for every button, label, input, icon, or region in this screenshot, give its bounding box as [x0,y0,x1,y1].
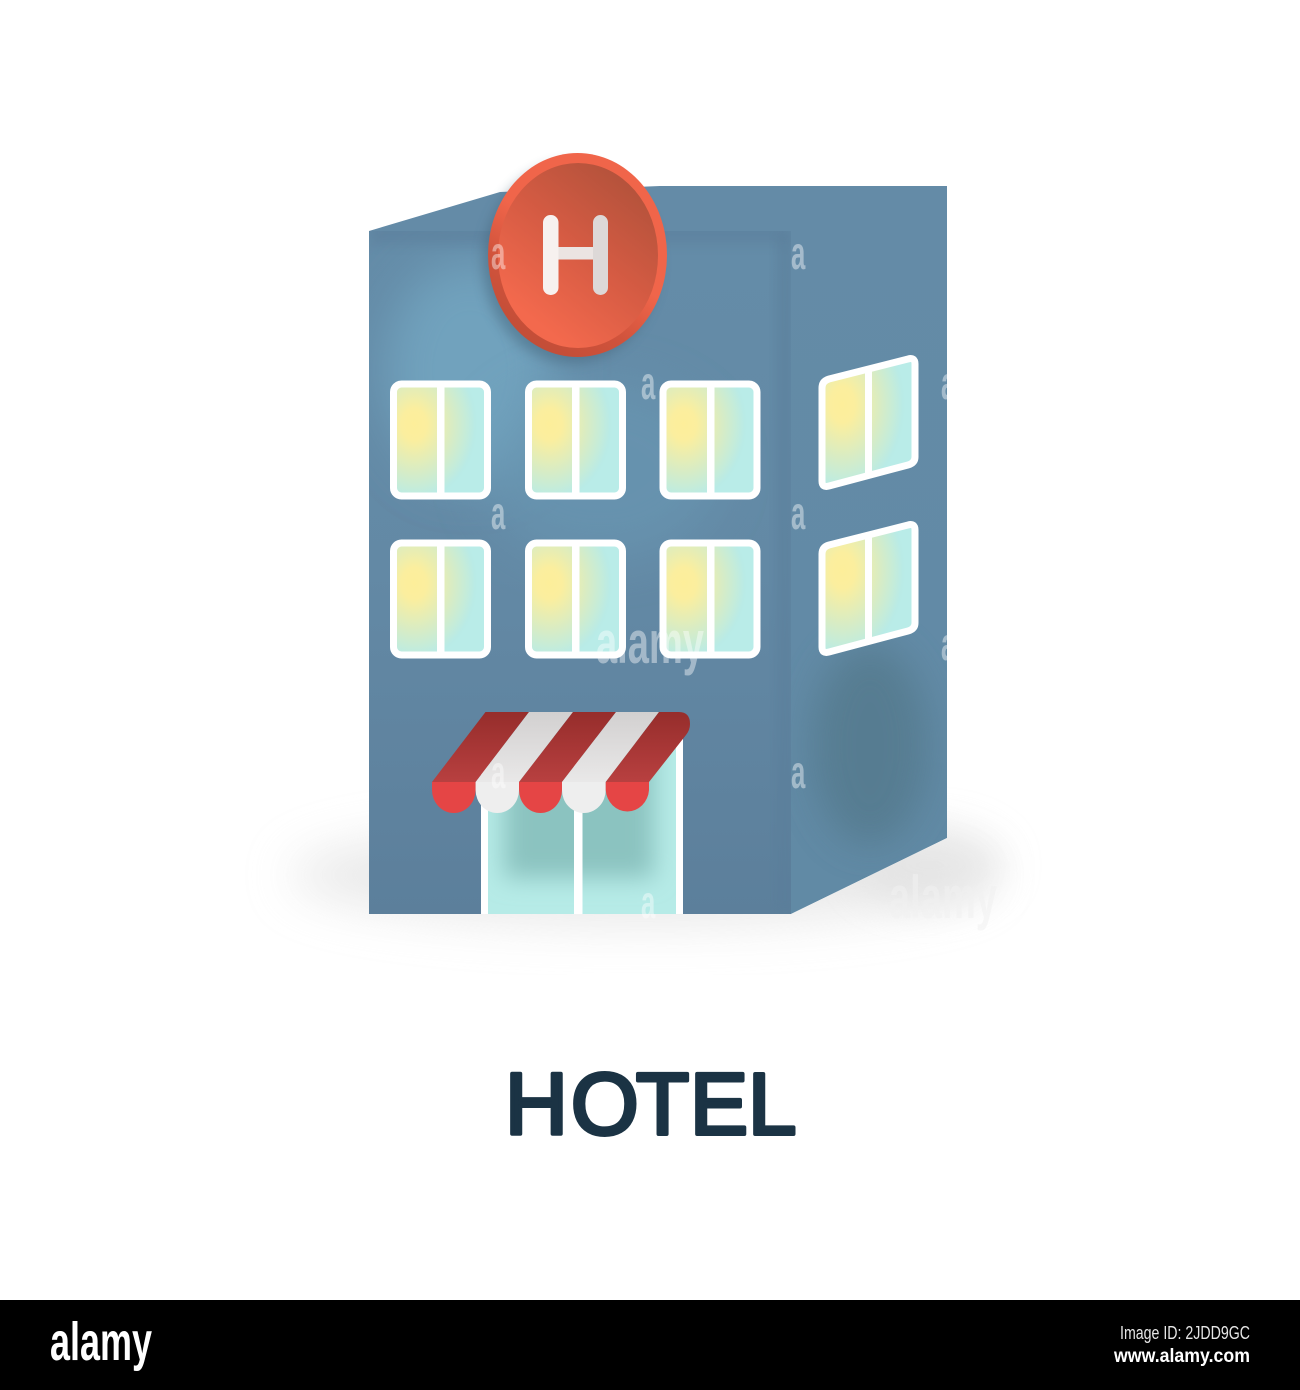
watermarks: alamy [889,864,997,931]
image id: Image ID: 2JDD9GC [1120,1323,1250,1343]
watermarks: a [941,618,956,670]
building [369,186,947,914]
sign: H badge [483,153,667,363]
watermarks: a [791,227,806,279]
door [481,730,683,914]
building side wall [791,186,947,914]
watermarks: a [491,746,506,798]
footer logo: alamy [50,1312,152,1372]
watermarks: a [491,487,506,539]
title: HOTEL [505,1056,796,1153]
ground shadow [290,825,1005,925]
footer bar [0,1300,1300,1390]
watermarks: a [641,876,656,928]
watermarks: a [491,227,506,279]
watermarks: a [941,357,956,409]
roof and side back face [369,186,947,260]
watermarks: a [791,487,806,539]
windows front row 2 [394,543,757,655]
website: www.alamy.com [1113,1346,1250,1367]
windows side wall [822,359,915,652]
watermarks: a [641,357,656,409]
watermarks: alamy [596,609,704,676]
awning [432,712,690,813]
building front wall [369,222,793,914]
windows front row 1 [394,384,757,496]
letter H [543,215,608,295]
watermarks: a [791,746,806,798]
watermarks [491,227,997,931]
